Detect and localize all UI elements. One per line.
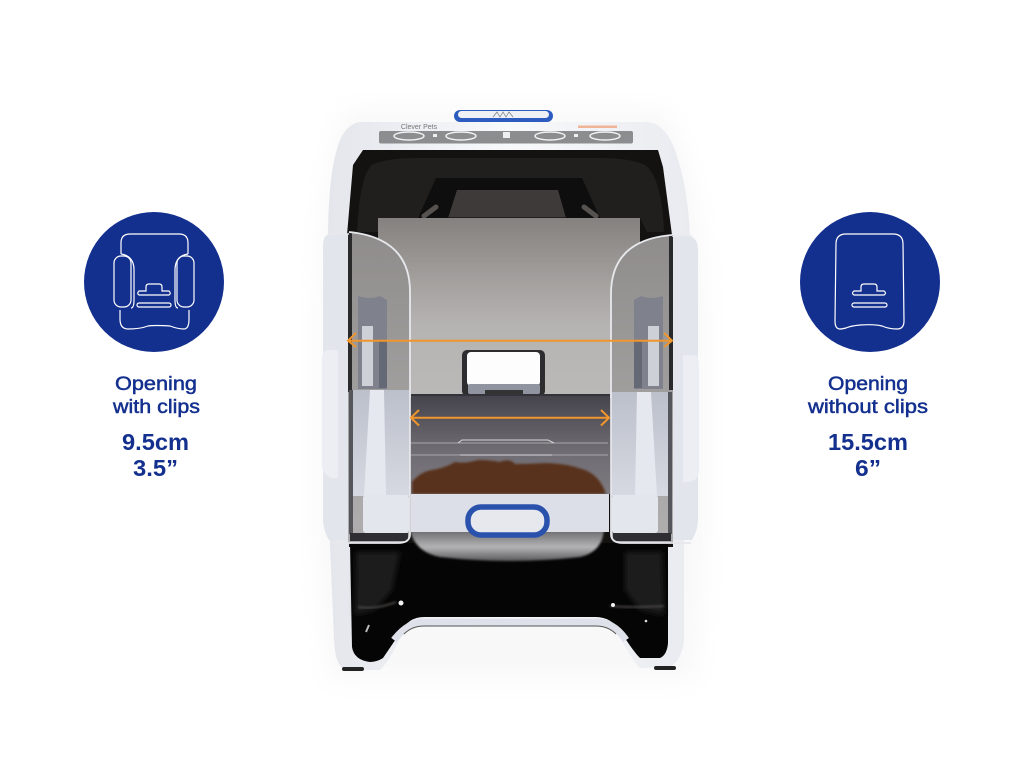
- window behind tray: [462, 350, 545, 396]
- icon: seat without clips: [800, 212, 940, 352]
- arrow: width with clips: [411, 410, 609, 426]
- control panel: [379, 124, 633, 144]
- back wall: [378, 218, 640, 398]
- control panel: Clever Pets: [401, 124, 438, 131]
- label: opening with clips: [112, 374, 200, 418]
- top button: [454, 110, 553, 122]
- feet: [342, 666, 676, 671]
- feeder body: [328, 122, 690, 670]
- arrow: width without clips: [348, 333, 672, 347]
- soft halo around feeder: [318, 110, 705, 680]
- food tray: [411, 394, 610, 494]
- panel: opening without clips: [800, 212, 940, 481]
- measurement: 9.5cm 3.5 inches: [122, 429, 189, 481]
- measurement: 9.5cm 3.5 inches: 3.5”: [133, 455, 178, 481]
- icon: seat with clips: [84, 212, 224, 352]
- product photo: pet feeder: [318, 110, 705, 680]
- arch trim: [394, 622, 626, 640]
- kibble: [412, 460, 606, 494]
- label: opening with clips: Opening: [115, 374, 197, 395]
- hood interior: [357, 158, 664, 232]
- bowl under tray: [410, 530, 604, 561]
- lower black window: [350, 543, 668, 662]
- label: opening with clips: with clips: [112, 397, 200, 418]
- measurement: 15.5cm 6 inches: [828, 429, 908, 481]
- measurement: 15.5cm 6 inches: 15.5cm: [828, 429, 908, 455]
- left door: [322, 232, 410, 543]
- tray handle: [468, 507, 547, 535]
- label: opening without clips: without clips: [807, 397, 928, 418]
- right door: [611, 235, 699, 543]
- left feed wheel: [358, 296, 387, 389]
- measurement: 9.5cm 3.5 inches: 9.5cm: [122, 429, 189, 455]
- front window frame: [347, 150, 673, 547]
- reflections on lower window: [355, 552, 664, 632]
- label: opening without clips: [807, 374, 928, 418]
- panel: opening with clips: [84, 212, 224, 481]
- label: opening without clips: Opening: [828, 374, 908, 395]
- tray front lip: [411, 494, 609, 532]
- right feed wheel: [634, 296, 663, 389]
- measurement: 15.5cm 6 inches: 6”: [855, 455, 881, 481]
